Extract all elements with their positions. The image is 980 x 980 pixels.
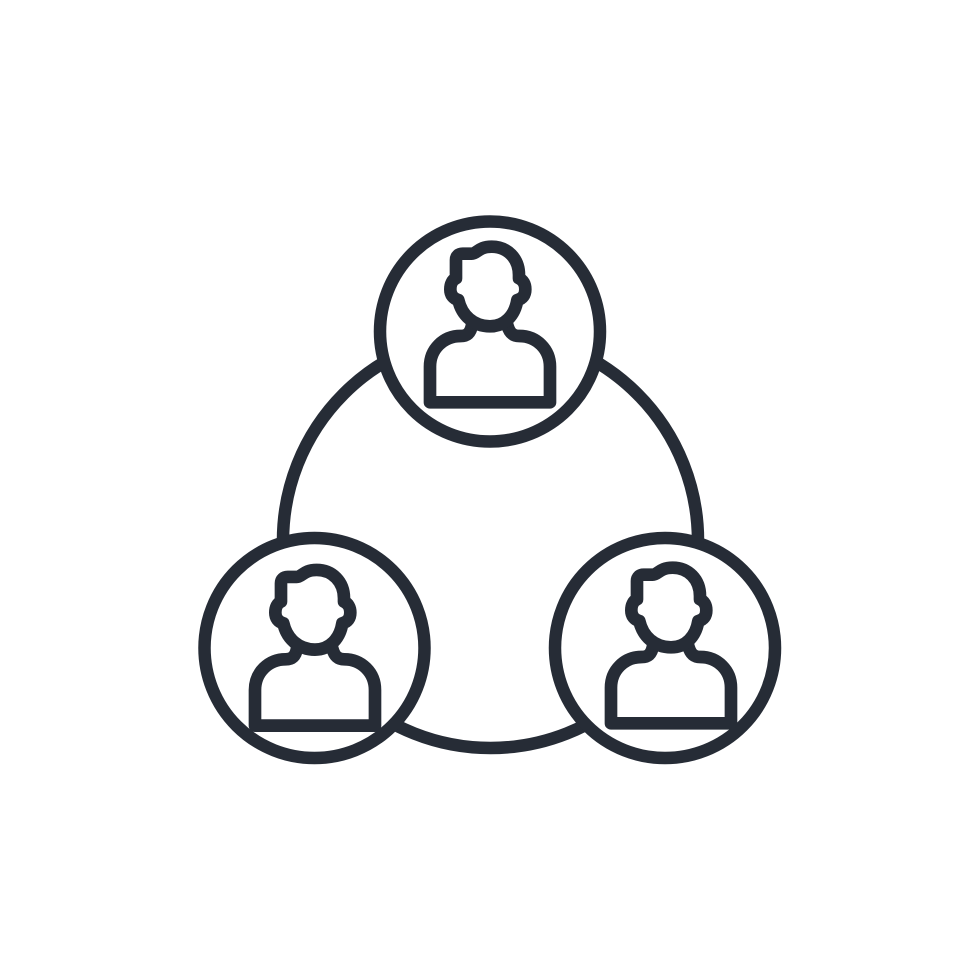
bottom-left person node [204,538,424,758]
bottom-right node ring [555,538,775,758]
top person figure [430,247,550,402]
bottom-left person figure [255,570,375,726]
top node ring [380,222,600,442]
bottom-left node ring [204,538,424,758]
connecting large circle [283,333,698,748]
top person node [380,222,600,442]
bottom-right person figure [611,568,731,723]
bottom-right person node [555,538,775,758]
